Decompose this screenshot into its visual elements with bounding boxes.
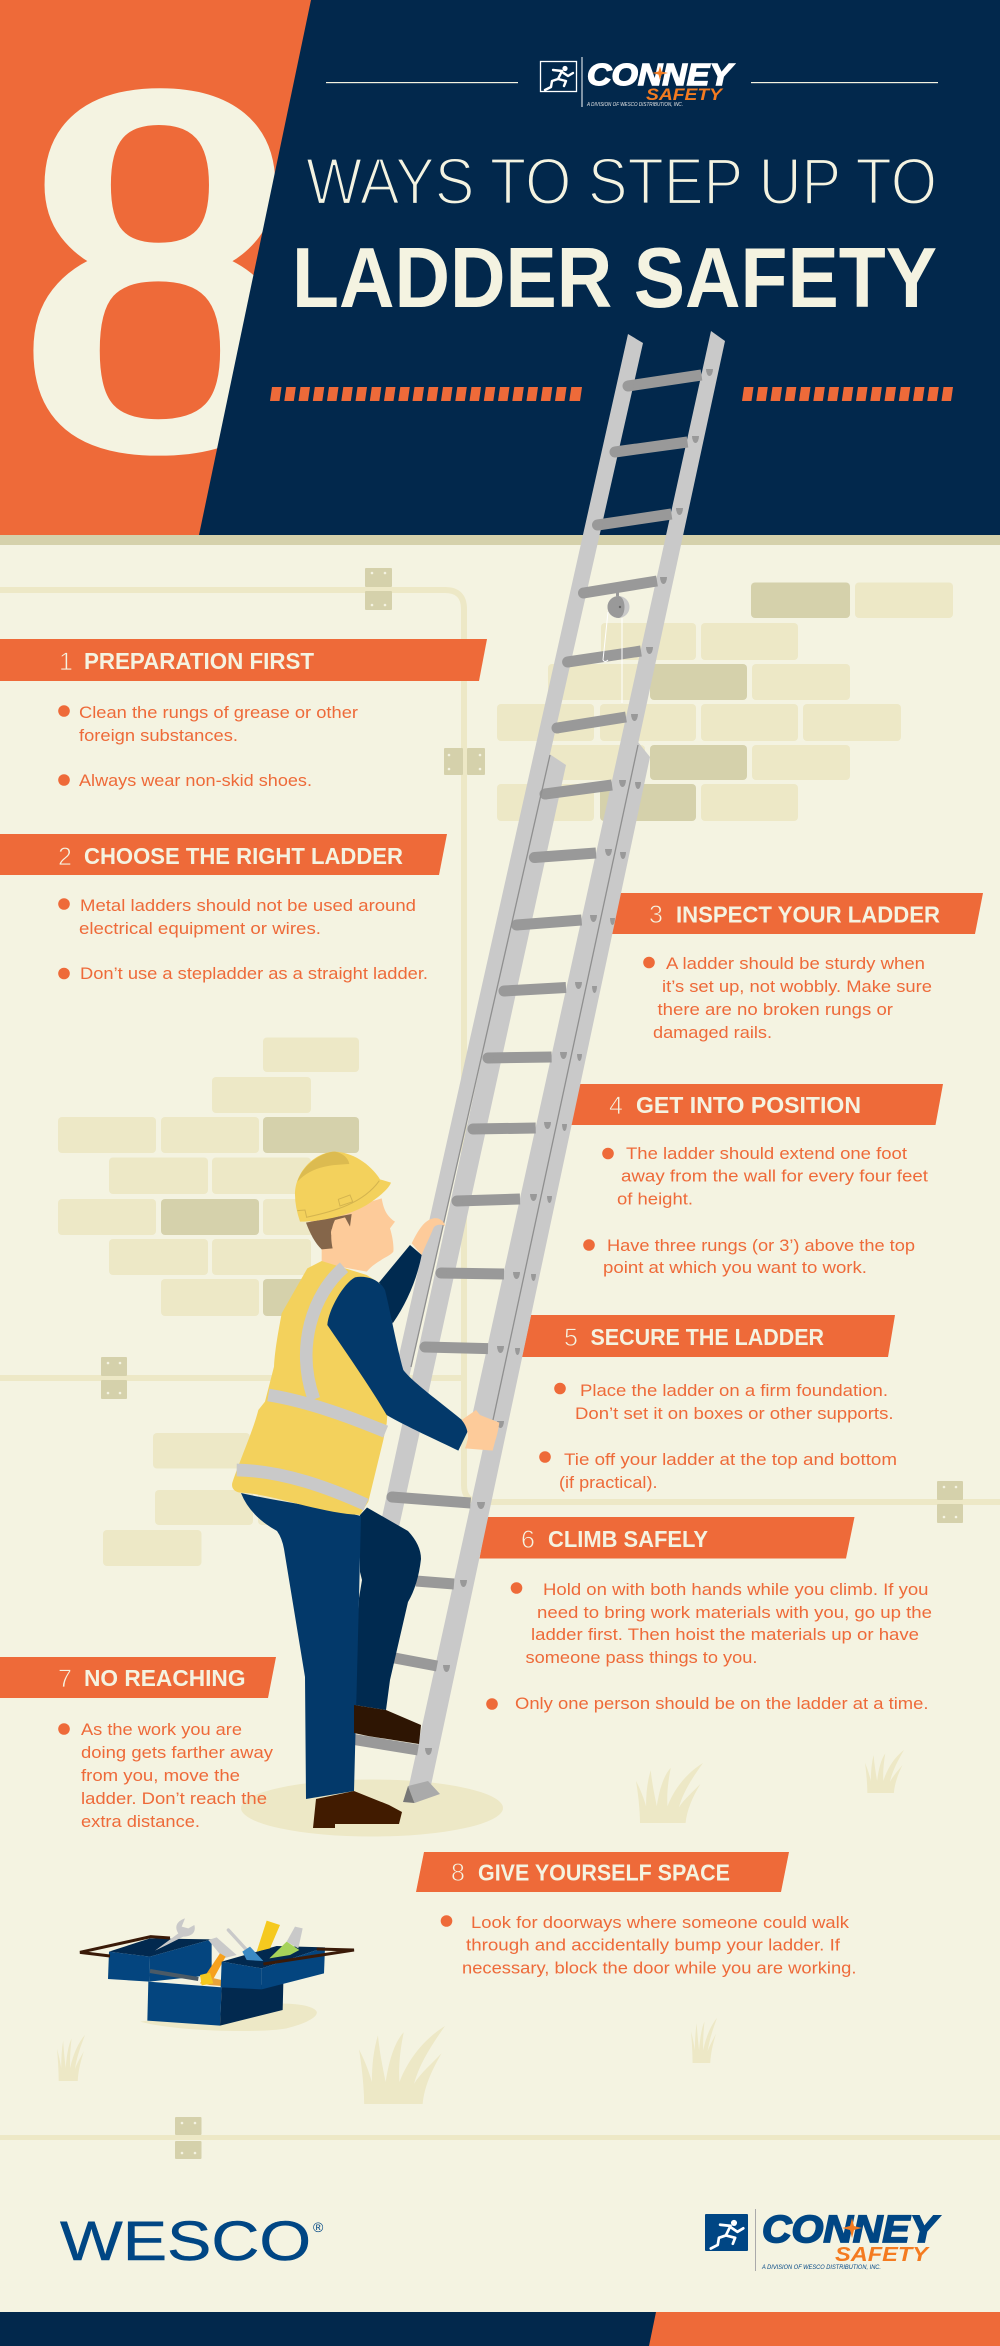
near hand [462, 1410, 499, 1451]
bullets 8: Look for doorways where someone could walk [471, 1913, 850, 1932]
toolbox base [147, 1982, 283, 2026]
heading bar 8: 8 [451, 1859, 465, 1887]
ground shadow [241, 1780, 503, 1836]
logo: Conney Safety header: SAFETY [646, 85, 724, 104]
header rule right [751, 82, 938, 83]
wrench [155, 1918, 195, 1951]
hammer [200, 1937, 237, 1985]
heading bar 5 [522, 1315, 895, 1357]
head [306, 1198, 395, 1272]
heading bar 7 [0, 1657, 276, 1698]
bullets 6: Only one person should be on the ladder at a time. [515, 1694, 928, 1713]
handles [80, 1937, 354, 1964]
right tray top [222, 1946, 325, 1968]
heading bar 7: NO REACHING [84, 1665, 246, 1691]
pliers [269, 1927, 303, 1958]
title line 1: WAYS TO STEP UP TO [306, 144, 937, 218]
heading bar 5: SECURE THE LADDER [590, 1324, 824, 1350]
heading bar 6 [480, 1517, 854, 1558]
bullets 5 [539, 1381, 897, 1492]
heading bar 2: CHOOSE THE RIGHT LADDER [84, 843, 403, 869]
bullets 4: away from the wall for every four feet [621, 1166, 928, 1186]
brick wall upper right [497, 582, 953, 821]
heading bar 4: 4 [609, 1092, 623, 1120]
panel: step 4 get into position [571, 1084, 943, 1277]
bullets 1: foreign substances. [79, 726, 238, 745]
bullets 6: someone pass things to you. [526, 1648, 758, 1667]
bullets 8: through and accidentally bump your ladder. If [466, 1936, 840, 1954]
pipe brackets [101, 568, 963, 2159]
bullets 8: necessary, block the door while you are working. [462, 1958, 856, 1978]
logo: Conney Safety header: A DIVISION OF WESCO DISTRIBUTION, INC. [586, 102, 683, 108]
bullets 4 [583, 1144, 928, 1277]
far arm and hand [378, 1218, 445, 1323]
bullets 2 [58, 896, 428, 983]
bullets 6: Hold on with both hands while you climb. If you [543, 1580, 928, 1599]
bullets 4: of height. [617, 1190, 693, 1208]
toolbox [80, 1918, 354, 2031]
ladder [354, 331, 725, 1803]
footer band [0, 2312, 1000, 2346]
panel: step 3 inspect your ladder [612, 893, 983, 1042]
wall pipes [0, 590, 1000, 2138]
heading bar 2 [0, 834, 447, 875]
hazard dashes right [742, 387, 953, 401]
bullets 2: electrical equipment or wires. [79, 919, 321, 938]
bullets 2: Don’t use a stepladder as a straight ladder. [80, 964, 428, 983]
logo: Conney Safety header: CONNEY [587, 57, 736, 92]
near arm [327, 1277, 470, 1451]
bullets 4: Have three rungs (or 3’) above the top [607, 1236, 915, 1255]
heading bar 3: INSPECT YOUR LADDER [676, 902, 940, 928]
safety vest [232, 1261, 393, 1515]
right tray front [221, 1947, 325, 1989]
bullets 1 [58, 703, 358, 790]
heading bar 4 [571, 1084, 943, 1125]
logo: WESCO: ® [313, 2219, 324, 2235]
bullets 6 [486, 1580, 932, 1713]
heading bar 6: CLIMB SAFELY [548, 1526, 708, 1552]
heading bar 3: 3 [649, 901, 663, 929]
ladder foot [403, 1781, 440, 1803]
logo: WESCO: WESCO [60, 2209, 311, 2272]
heading bar 5: 5 [564, 1324, 578, 1352]
hard hat [295, 1152, 391, 1222]
worker upper body [232, 1152, 499, 1515]
bullets 5: Don’t set it on boxes or other supports. [575, 1404, 894, 1423]
heading bar 1: PREPARATION FIRST [84, 648, 315, 674]
bullets 3: damaged rails. [653, 1023, 772, 1042]
bullets 7: extra distance. [81, 1812, 200, 1831]
logo: Conney Safety header [540, 57, 736, 108]
heading bar 1 [0, 639, 487, 681]
heading bar 8 [416, 1852, 789, 1892]
bullets 1: Always wear non-skid shoes. [79, 771, 312, 790]
bullets 1: Clean the rungs of grease or other [79, 703, 358, 722]
bullets 7: from you, move the [81, 1766, 240, 1785]
screwdriver [228, 1930, 263, 1961]
brick wall left [58, 1038, 359, 1566]
header band [0, 0, 1000, 555]
heading bar 7: 7 [58, 1665, 72, 1693]
left tray top [109, 1938, 212, 1957]
bullets 7: As the work you are [81, 1720, 242, 1739]
ladder rails [364, 331, 725, 1790]
heading bar 3 [612, 893, 983, 934]
bullets 6: need to bring work materials with you, go up the [537, 1603, 932, 1622]
logo: Conney Safety footer [705, 2209, 941, 2271]
bullets 7: ladder. Don’t reach the [81, 1789, 267, 1808]
bullets 5: (if practical). [559, 1473, 658, 1492]
panel: step 6 climb safely [480, 1517, 932, 1713]
bullets 4: point at which you want to work. [603, 1258, 867, 1277]
heading bar 2: 2 [58, 843, 72, 871]
drill [150, 1971, 222, 1986]
panel: step 2 choose the right ladder [0, 834, 447, 983]
bullets 3 [643, 954, 932, 1042]
logo: Conney Safety footer: A DIVISION OF WESCO DISTRIBUTION, INC. [761, 2265, 881, 2271]
bullets 2: Metal ladders should not be used around [80, 896, 416, 915]
logo: Conney Safety footer: SAFETY [835, 2244, 930, 2266]
bullets 3: there are no broken rungs or [658, 1000, 893, 1019]
panel: step 5 secure the ladder [522, 1315, 897, 1492]
bullets 4: The ladder should extend one foot [626, 1144, 907, 1163]
header rule left [326, 82, 518, 83]
panel: step 7 no reaching [0, 1657, 276, 1831]
bullets 6: ladder first. Then hoist the materials up or have [531, 1625, 919, 1644]
bullets 7 [58, 1720, 274, 1831]
pulley and rope [603, 588, 630, 703]
panel: step 1 preparation first [0, 639, 487, 790]
rung rivets [425, 369, 713, 1755]
panel: step 8 give yourself space [416, 1852, 856, 1978]
bullets 5: Tie off your ladder at the top and bottom [564, 1450, 897, 1469]
worker boots [313, 1705, 421, 1828]
rail seam lines [411, 745, 638, 1420]
bullets 3: it’s set up, not wobbly. Make sure [662, 977, 932, 996]
heading bar 1: 1 [59, 648, 73, 676]
title line 2: LADDER SAFETY [292, 231, 937, 326]
heading bar 6: 6 [521, 1526, 535, 1554]
bullets 7: doing gets farther away [81, 1743, 274, 1762]
ladder rungs [354, 375, 702, 1750]
ruler [257, 1921, 280, 1952]
worker legs [241, 1493, 421, 1799]
bullets 8 [441, 1913, 856, 1978]
heading bar 4: GET INTO POSITION [636, 1092, 861, 1118]
logo: Conney Safety footer: CONNEY [762, 2209, 941, 2251]
hazard dashes left [270, 387, 582, 401]
bullets 3: A ladder should be sturdy when [666, 954, 925, 973]
heading bar 8: GIVE YOURSELF SPACE [478, 1860, 730, 1886]
left tray front [108, 1939, 212, 1982]
navy header panel [199, 0, 1000, 535]
grass tufts [57, 1750, 904, 2104]
bullets 5: Place the ladder on a firm foundation. [580, 1381, 888, 1400]
worker figure [232, 1152, 499, 1828]
